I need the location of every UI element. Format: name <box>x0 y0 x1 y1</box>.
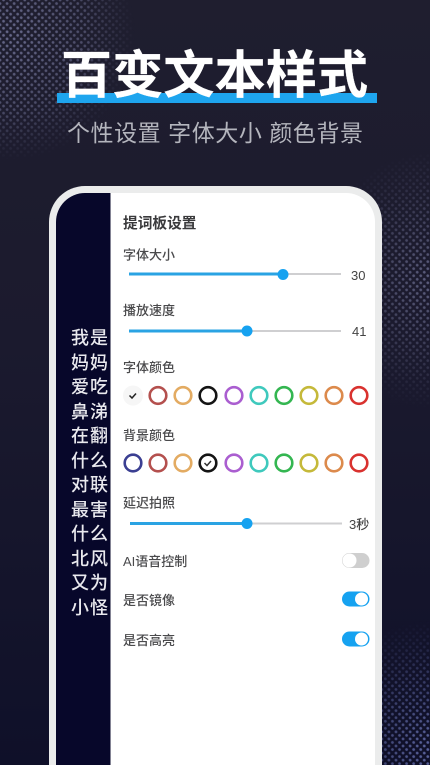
panel: teleprompter text preview: 对联 <box>71 475 109 495</box>
panel: settings <box>123 214 370 648</box>
panel: teleprompter text preview: 北风 <box>71 549 109 569</box>
panel: teleprompter text preview: 又为 <box>71 573 109 593</box>
slider: font size <box>123 248 365 283</box>
slider: delayed photo: 3秒 <box>349 517 369 532</box>
slider: font size: 30 <box>351 268 365 283</box>
slider: delayed photo <box>123 496 369 532</box>
background color swatches: 背景颜色 <box>123 428 175 443</box>
slider: playback speed: 播放速度 <box>123 303 175 318</box>
title with blue underline: 百变文本样式 <box>61 47 368 104</box>
panel: teleprompter text preview: 什么 <box>71 524 109 544</box>
slider: font size: 字体大小 <box>123 248 175 262</box>
panel: teleprompter text preview <box>56 193 110 765</box>
panel: teleprompter text preview: 妈妈 <box>71 353 109 373</box>
panel: teleprompter text preview: 在翻 <box>71 426 109 446</box>
font color swatches: 字体颜色 <box>123 360 175 375</box>
phone frame <box>49 186 382 765</box>
panel: teleprompter text preview: 鼻涕 <box>71 401 109 422</box>
toggle row: highlight <box>123 632 370 648</box>
font color swatches <box>123 360 367 406</box>
background color swatches <box>123 428 367 471</box>
slider: playback speed: 41 <box>352 324 366 339</box>
panel: teleprompter text preview: 小怪 <box>71 598 109 618</box>
panel: teleprompter text preview: 爱吃 <box>71 377 109 397</box>
slider: delayed photo: 延迟拍照 <box>123 496 175 510</box>
panel: teleprompter text preview: 最害 <box>71 500 109 520</box>
panel: teleprompter text preview: 什么 <box>71 451 109 471</box>
slider: playback speed <box>123 303 366 339</box>
toggle row: AI voice control: AI语音控制 <box>123 554 187 569</box>
panel: teleprompter text preview: 我是 <box>71 328 109 348</box>
toggle row: mirror <box>123 592 370 608</box>
toggle row: AI voice control <box>123 553 370 569</box>
toggle row: highlight: 是否高亮 <box>123 633 175 648</box>
subtitle: 个性设置 字体大小 颜色背景 <box>67 120 363 146</box>
toggle row: mirror: 是否镜像 <box>123 593 175 608</box>
settings heading: 提词板设置 <box>123 214 196 232</box>
